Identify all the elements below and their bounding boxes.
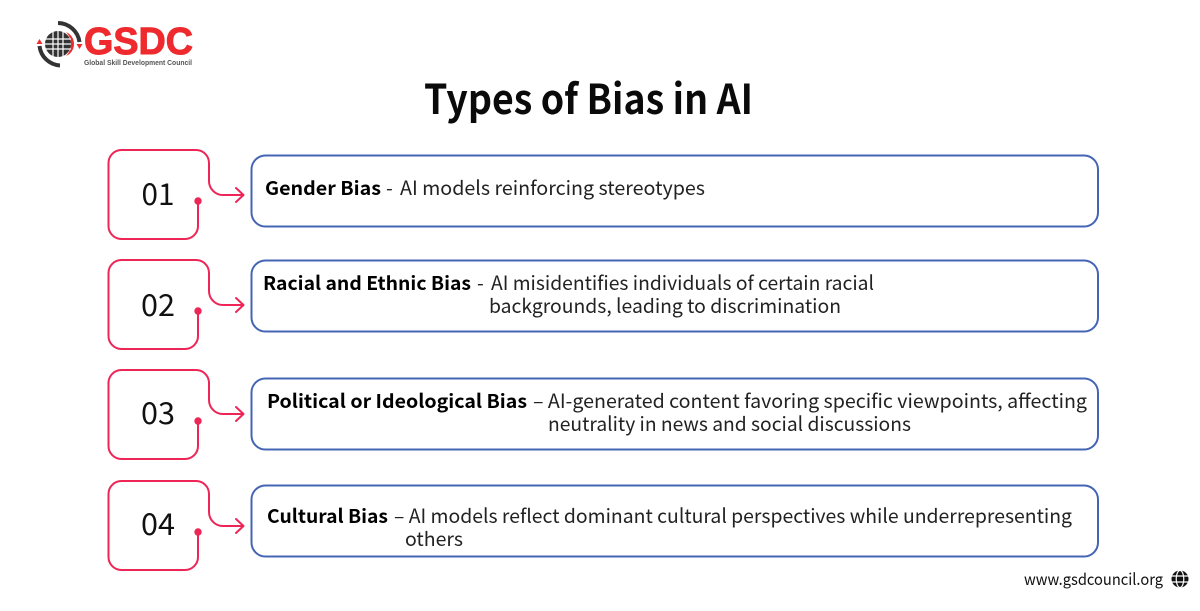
icon: globe <box>1172 570 1188 588</box>
card text: others <box>405 523 463 552</box>
number frame with arrow <box>108 260 244 349</box>
number frame with arrow <box>108 150 244 239</box>
card text <box>267 500 1072 552</box>
card text <box>265 172 705 201</box>
card <box>252 260 1098 332</box>
row 04 <box>108 481 1098 570</box>
card text: - <box>477 267 484 296</box>
website url: www.gsdcouncil.org <box>1024 566 1163 590</box>
card <box>252 486 1098 556</box>
logo wordmark: GSDC <box>84 21 193 63</box>
card text: Cultural Bias <box>267 502 388 529</box>
icon: globe <box>36 23 82 66</box>
title: Types of Bias in AI <box>424 66 753 126</box>
number: 04 <box>141 500 175 544</box>
logo tagline: Global Skill Development Council <box>84 60 192 67</box>
card <box>252 156 1098 226</box>
card text: – AI-generated content favoring specific viewpoints, affecting <box>533 385 1087 414</box>
card <box>252 378 1098 450</box>
card text: neutrality in news and social discussions <box>548 408 911 437</box>
card text: AI misidentifies individuals of certain racial <box>491 267 874 296</box>
card text: Political or Ideological Bias <box>267 387 527 414</box>
card text: - <box>386 172 393 201</box>
website footer <box>1024 566 1188 590</box>
number: 01 <box>142 170 174 214</box>
number frame with arrow <box>108 370 244 459</box>
row 02 <box>108 260 1098 349</box>
row 01 <box>108 150 1098 239</box>
number frame with arrow <box>108 481 244 570</box>
number: 02 <box>141 281 175 325</box>
card text <box>267 385 1087 437</box>
card text <box>263 267 874 319</box>
card text: backgrounds, leading to discrimination <box>489 290 841 319</box>
number: 03 <box>141 389 175 433</box>
card text: Racial and Ethnic Bias <box>263 269 471 296</box>
card text: – AI models reflect dominant cultural perspectives while underrepresenting <box>394 500 1072 529</box>
logo: GSDC <box>36 21 193 67</box>
row 03 <box>108 370 1098 459</box>
card text: AI models reinforcing stereotypes <box>400 172 705 201</box>
card text: Gender Bias <box>265 174 381 201</box>
